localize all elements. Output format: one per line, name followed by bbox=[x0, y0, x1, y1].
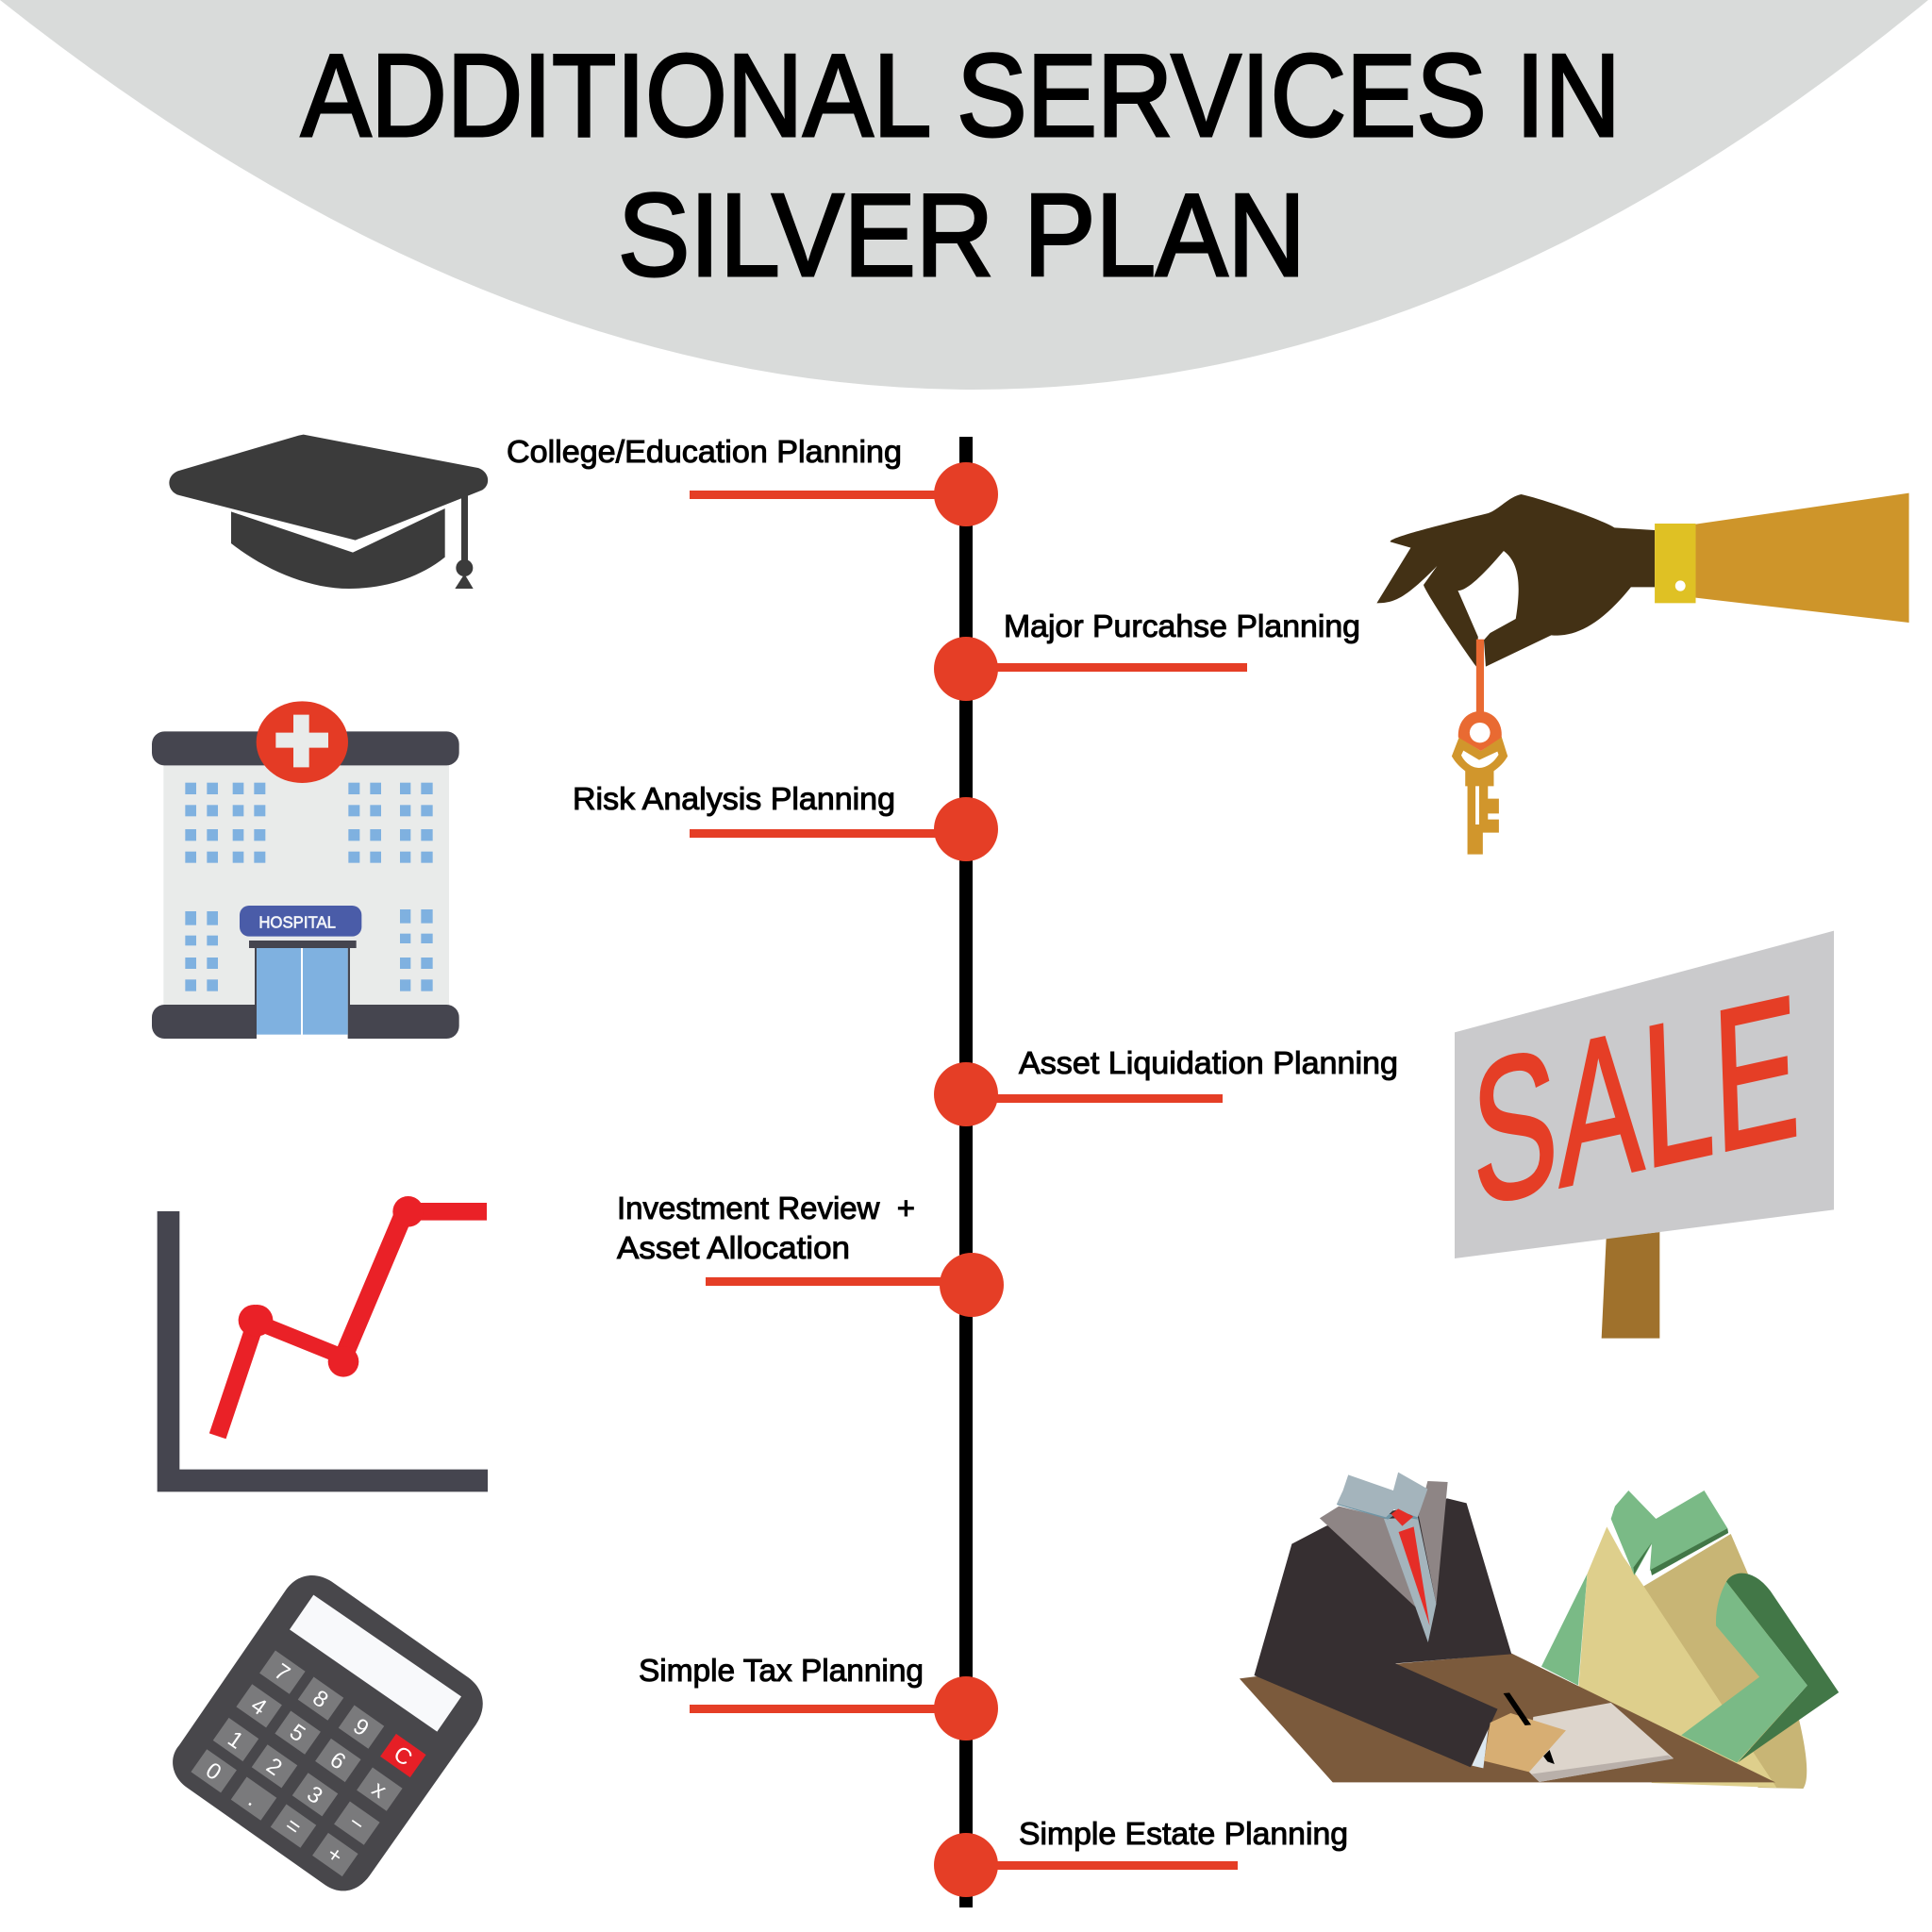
key equals: = bbox=[280, 1812, 306, 1840]
icon: line chart bbox=[158, 1196, 488, 1491]
key minus bbox=[334, 1802, 380, 1845]
key clear bbox=[380, 1734, 426, 1777]
key 9 bbox=[339, 1706, 384, 1749]
key 3 bbox=[292, 1773, 338, 1816]
timeline item: simple estate planning bbox=[934, 1816, 1348, 1897]
desk bbox=[1240, 1654, 1775, 1782]
key equals bbox=[271, 1805, 316, 1848]
title: ADDITIONAL SERVICES IN bbox=[301, 31, 1621, 161]
timeline item: simple estate planning: Simple Estate Planning bbox=[1019, 1816, 1348, 1851]
timeline item: investment review and asset allocation: Asset Allocation bbox=[617, 1230, 850, 1265]
timeline item: asset liquidation planning: Asset Liquidation Planning bbox=[1019, 1045, 1398, 1080]
icon: calculator bbox=[173, 1575, 483, 1890]
key 0: 0 bbox=[201, 1757, 225, 1786]
key multiply bbox=[357, 1768, 403, 1811]
header panel: grey curved banner bbox=[0, 0, 1928, 390]
key 4 bbox=[236, 1684, 282, 1727]
key decimal point bbox=[231, 1777, 276, 1821]
key 7 bbox=[259, 1651, 306, 1694]
key 1: 1 bbox=[223, 1726, 248, 1755]
key 3: 3 bbox=[302, 1781, 327, 1809]
key clear: C bbox=[389, 1741, 417, 1772]
paper bbox=[1529, 1703, 1674, 1782]
timeline item: investment review and asset allocation: Investment Review + bbox=[617, 1191, 915, 1225]
icon: for sale sign bbox=[1455, 931, 1834, 1339]
key 5 bbox=[275, 1711, 321, 1755]
key 0 bbox=[191, 1749, 237, 1792]
key minus: − bbox=[343, 1809, 369, 1838]
key multiply: x bbox=[367, 1776, 391, 1804]
key decimal point: . bbox=[243, 1787, 263, 1811]
icon: hand holding key bbox=[1376, 493, 1909, 855]
timeline item: major purchase planning bbox=[934, 608, 1360, 701]
timeline item: simple tax planning: Simple Tax Planning bbox=[639, 1653, 924, 1688]
timeline item: investment review and asset allocation bbox=[617, 1191, 1004, 1317]
timeline item: risk analysis planning bbox=[573, 781, 998, 861]
key 6 bbox=[315, 1739, 361, 1782]
timeline item: major purchase planning: Major Purcahse Planning bbox=[1004, 608, 1360, 643]
key 9: 9 bbox=[348, 1713, 374, 1741]
timeline item: simple tax planning bbox=[639, 1653, 998, 1740]
icon: hospital building bbox=[152, 701, 459, 1039]
timeline item: risk analysis planning: Risk Analysis Planning bbox=[573, 781, 895, 816]
key plus bbox=[312, 1833, 358, 1876]
key 2: 2 bbox=[261, 1753, 287, 1781]
title bbox=[301, 31, 1621, 301]
icon: hospital building: HOSPITAL bbox=[258, 912, 336, 931]
man in suit bbox=[1254, 1473, 1511, 1767]
key 7: 7 bbox=[270, 1658, 294, 1687]
key 8 bbox=[298, 1677, 343, 1721]
key 2 bbox=[252, 1744, 297, 1788]
pen and writing hand bbox=[1472, 1692, 1566, 1772]
key 5: 5 bbox=[285, 1719, 309, 1747]
key 8: 8 bbox=[308, 1685, 333, 1713]
timeline item: asset liquidation planning bbox=[934, 1045, 1398, 1126]
icon: graduation cap bbox=[169, 435, 488, 589]
key 4: 4 bbox=[246, 1692, 271, 1721]
key 6: 6 bbox=[325, 1747, 350, 1775]
timeline item: college education planning bbox=[507, 434, 998, 526]
icon: estate planning meeting at desk bbox=[1240, 1473, 1839, 1789]
key 1 bbox=[213, 1718, 258, 1761]
woman figure bbox=[1541, 1491, 1839, 1789]
title: SILVER PLAN bbox=[618, 171, 1306, 301]
timeline spine bbox=[959, 437, 973, 1907]
timeline item: college education planning: College/Education Planning bbox=[507, 434, 902, 469]
key plus: + bbox=[322, 1841, 347, 1870]
